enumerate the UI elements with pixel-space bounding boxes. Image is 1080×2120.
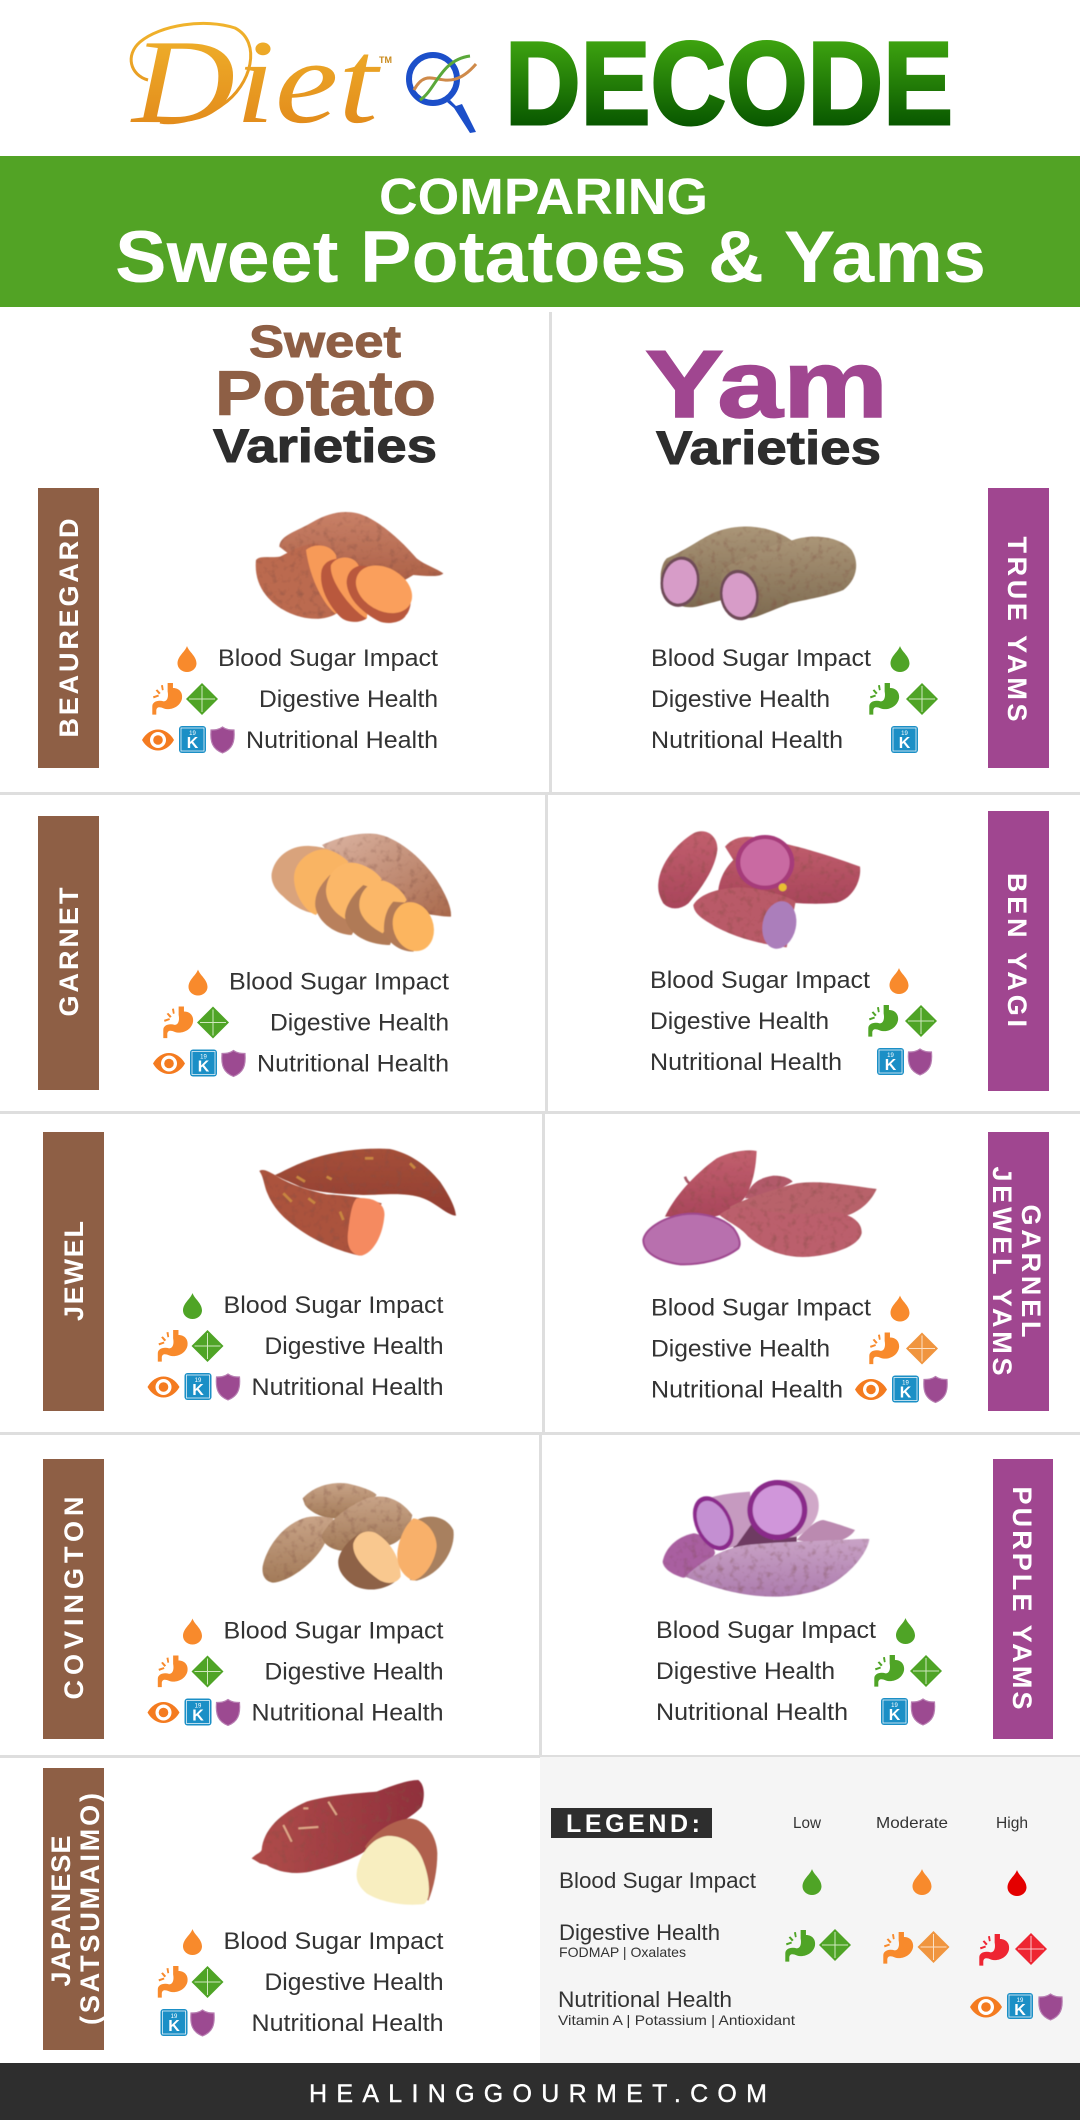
row: Ben Yagi ratings: Digestive Health [650,1008,829,1035]
icon: potassium [160,2009,188,2036]
icon: antioxidant shield [222,1050,245,1076]
row: Japanese ratings: Digestive Health [264,1969,444,1996]
icon: orange stomach [158,1330,188,1362]
row: Purple Yams ratings: Digestive Health [656,1658,835,1685]
row: Jewel ratings [148,1292,444,1401]
heading: sweet potato varieties: Sweet [249,316,401,367]
footer [0,2063,1080,2120]
icon: potassium: K [168,2018,180,2035]
variety label: Beauregard [38,488,99,768]
icon: green diamond [905,1005,937,1037]
icon: orange drop [890,1296,910,1322]
icon: green drop [890,646,910,672]
variety label: True Yams: TRUE YAMS [1002,536,1032,722]
row: Ben Yagi ratings [650,967,937,1076]
legend row: nutritional: Vitamin A | Potassium | Antioxidant [558,2012,795,2028]
photo: Ben Yagi yam [658,831,860,952]
icon: green diamond [192,1656,224,1688]
photo: True Yams [657,526,856,623]
variety label: Beauregard: BEAUREGARD [54,518,84,738]
row: Garnet ratings: Digestive Health [270,1010,449,1036]
variety label: Purple Yams: PURPLE YAMS [1007,1486,1037,1710]
row: Beauregard ratings [142,645,438,754]
icon: green diamond [197,1006,229,1038]
photo: Jewel sweet potato [259,1149,456,1256]
icon: potassium: 19 [901,731,908,737]
legend row: nutritional: Nutritional Health [558,1987,732,2012]
icon: potassium [892,1376,919,1402]
icon: orange diamond [906,1332,938,1364]
icon: antioxidant shield [216,1374,240,1400]
icon: orange drop [178,646,196,672]
icon: green stomach [869,683,899,715]
icon: orange stomach [869,1333,899,1364]
icon: potassium [881,1698,908,1725]
icon: green diamond [192,1966,224,1998]
legend row: digestive: FODMAP | Oxalates [559,1944,686,1960]
variety label: Garnel Jewel Yams: JEWEL YAMS [987,1166,1017,1376]
icon: antioxidant shield [211,727,234,753]
icon: potassium: K [192,1708,204,1724]
icon: potassium [190,1050,217,1076]
banner [0,156,1080,307]
heading: sweet potato varieties: Varieties [213,419,437,472]
legend row: nutritional: K [1014,2002,1026,2019]
icon: potassium: K [889,1707,901,1724]
variety label: Purple Yams [993,1459,1053,1739]
variety label: Japanese Satsumaimo: JAPANESE [46,1836,76,1986]
variety label: Jewel: JEWEL [59,1221,89,1321]
row: Jewel ratings: Blood Sugar Impact [224,1292,444,1319]
icon: antioxidant shield [924,1376,947,1402]
banner heading: sweet potatoes and yams: Sweet Potatoes & Yams [115,217,986,298]
icon: eye [148,1702,180,1723]
variety label: Ben Yagi: BEN YAGI [1002,873,1032,1027]
variety label: Garnel Jewel Yams: GARNEL [1016,1204,1046,1338]
icon: orange drop [188,970,208,996]
icon: potassium: 19 [195,1704,202,1710]
banner heading: comparing: COMPARING [379,168,708,225]
logo word: DECODE: DECODE [505,18,953,150]
variety label: Covington: COVINGTON [59,1496,89,1700]
icon: orange drop [183,1618,202,1644]
row: Covington ratings: Nutritional Health [252,1700,444,1726]
row: Purple Yams ratings [656,1617,942,1726]
photo: Covington sweet potato [262,1483,454,1590]
row: Covington ratings: Digestive Health [264,1658,444,1686]
footer: HEALINGGOURMET.COM [309,2080,767,2108]
heading: yam varieties: Yam [645,331,888,438]
icon: potassium: 19 [195,1378,202,1384]
logo word: Diet: TM [379,55,392,65]
icon: green drop [183,1293,202,1319]
icon: orange drop [183,1929,202,1955]
heading: sweet potato varieties: Potato [215,359,436,429]
icon: green diamond [186,683,218,715]
icon: eye [855,1379,887,1400]
icon: potassium: 19 [200,1054,207,1060]
row: True Yams ratings: Nutritional Health [651,727,843,754]
variety label: Garnel Jewel Yams [987,1132,1049,1411]
row: Japanese ratings: Nutritional Health [252,2010,444,2037]
row: Garnel Jewel ratings: Blood Sugar Impact [651,1294,871,1322]
photo: Purple yam [663,1480,869,1597]
row: Beauregard ratings: Nutritional Health [246,727,438,754]
heading: sweet potato varieties [213,316,437,472]
icon: potassium: 19 [887,1053,894,1059]
icon: orange stomach [158,1966,188,1998]
icon: potassium [184,1698,212,1726]
icon: potassium: K [192,1382,204,1399]
icon: potassium [877,1048,904,1075]
photo: Beauregard sweet potato [256,512,443,623]
legend column labels [793,1815,1028,1832]
legend column labels: Moderate [876,1815,948,1832]
icon: green drop [896,1618,915,1644]
row: Garnel Jewel ratings: Nutritional Health [651,1376,843,1404]
icon: potassium [891,726,918,753]
variety label: Japanese Satsumaimo: (SATSUMAIMO) [75,1793,105,2025]
legend title: LEGEND: [566,1810,700,1838]
icon: magnifier with DNA [409,55,476,133]
icon: potassium: K [899,735,911,752]
row: Purple Yams ratings: Nutritional Health [656,1699,848,1726]
icon: green stomach [868,1005,898,1037]
legend row: digestive [559,1920,1047,1966]
row: Covington ratings [148,1618,444,1726]
row: True Yams ratings [651,645,938,754]
row: Beauregard ratings: Digestive Health [259,686,438,713]
icon: potassium [179,726,206,753]
icon: green diamond [192,1330,224,1362]
row: True Yams ratings: Blood Sugar Impact [651,645,871,672]
legend column labels: High [996,1815,1028,1832]
icon: potassium: K [885,1057,897,1074]
row: Japanese ratings [158,1928,444,2037]
variety label: Ben Yagi [988,811,1049,1091]
heading: yam varieties: Varieties [656,421,881,474]
icon: orange drop [890,968,908,994]
icon: orange stomach [163,1007,193,1038]
legend row: nutritional [558,1987,1062,2028]
icon: potassium: 19 [891,1703,898,1709]
legend row: blood sugar: Blood Sugar Impact [559,1868,756,1893]
row: True Yams ratings: Digestive Health [651,686,830,713]
icon: antioxidant shield [911,1699,935,1725]
variety label: Covington [43,1459,104,1739]
icon: orange stomach [158,1656,188,1687]
row: Jewel ratings: Nutritional Health [252,1374,444,1401]
variety label: True Yams [988,488,1049,768]
photo: Garnet sweet potato [272,834,451,957]
variety label: Japanese Satsumaimo [43,1768,105,2050]
dividers [0,312,1080,1758]
variety label: Garnet: GARNET [54,887,84,1016]
row: Purple Yams ratings: Blood Sugar Impact [656,1617,876,1644]
icon: potassium: K [900,1384,912,1402]
row: Garnet ratings: Nutritional Health [257,1050,449,1078]
icon: eye [142,730,174,750]
heading: yam varieties [645,331,888,474]
logo word: Diet: Diet [130,15,381,148]
photo: Japanese sweet potato [252,1780,437,1905]
legend row: nutritional: 19 [1017,1998,1024,2004]
row: Covington ratings: Blood Sugar Impact [224,1618,444,1644]
row: Garnet ratings [153,968,449,1078]
legend row: digestive: Digestive Health [559,1920,720,1945]
variety label: Garnet [38,816,99,1090]
row: Garnel Jewel ratings: Digestive Health [651,1336,830,1362]
icon: green stomach [874,1655,904,1687]
row: Ben Yagi ratings: Blood Sugar Impact [650,967,870,994]
row: Beauregard ratings: Blood Sugar Impact [218,645,438,672]
icon: green diamond [906,683,938,715]
icon: potassium: K [187,735,199,752]
variety label: Jewel [43,1132,104,1411]
row: Japanese ratings: Blood Sugar Impact [224,1928,444,1955]
icon: antioxidant shield [908,1049,932,1075]
icon: antioxidant shield [216,1700,240,1726]
icon: antioxidant shield [191,2010,214,2036]
row: Ben Yagi ratings: Nutritional Health [650,1049,842,1076]
row: Garnet ratings: Blood Sugar Impact [229,968,449,996]
icon: potassium: 19 [902,1380,909,1386]
panel: legend [540,1757,1080,2063]
icon: potassium: K [198,1058,210,1076]
icon: green diamond [910,1655,942,1687]
legend column labels: Low [793,1815,821,1832]
photo: Garnel Jewel yam [643,1150,877,1264]
icon: orange stomach [152,683,182,715]
row: Jewel ratings: Digestive Health [264,1333,444,1360]
legend row: blood sugar [559,1868,1026,1896]
logo: Diet Decode [130,15,953,150]
icon: potassium: 19 [189,731,196,737]
row: Garnel Jewel ratings [651,1294,947,1404]
icon: potassium [184,1373,212,1400]
icon: eye [153,1053,185,1074]
icon: eye [148,1376,180,1398]
icon: potassium: 19 [171,2014,178,2020]
